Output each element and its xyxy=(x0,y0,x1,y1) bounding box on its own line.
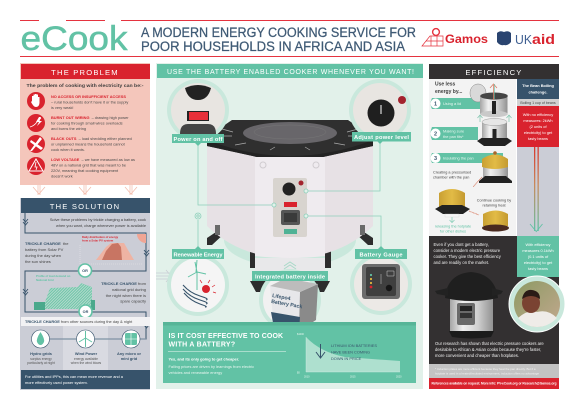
text: grid trickle charge: the night when there is xyxy=(106,293,146,298)
flow line xyxy=(25,213,146,339)
chart: solar energy: from a Solar PV system xyxy=(82,238,114,242)
pot: releasing: releasing the hotplate xyxy=(435,224,471,228)
step 1: lid xyxy=(430,84,508,117)
chart: battery price: DOWN IN PRICE xyxy=(331,356,362,361)
chart: battery price: 2010 xyxy=(304,376,310,378)
item: burnt out wiring: – drawing high power xyxy=(90,115,129,120)
column: bean boiling challenge: measures: 2kWh xyxy=(523,118,553,123)
cooker body xyxy=(207,140,373,258)
text: solar trickle charge: battery from Solar PV xyxy=(25,247,64,252)
column: bean boiling challenge: electricity) to get xyxy=(524,130,553,135)
panel: pressure cooker: measures 0.1kWh xyxy=(522,248,554,253)
panel: efficiency xyxy=(429,64,565,389)
step 1: lid: 1 xyxy=(434,102,437,108)
item: burnt out wiring xyxy=(27,114,129,132)
heading: WITH A BATTERY? xyxy=(168,342,236,348)
body text: Falling prices are driven by learnings from electric xyxy=(168,364,254,369)
cooker feet xyxy=(207,228,373,245)
text: research: desirable to African & Asian cooks because they're faster, xyxy=(435,347,541,352)
step 3: insulating: Creating a pressurised xyxy=(433,170,471,174)
step 2: pan flat xyxy=(430,115,512,146)
panel: the problem xyxy=(20,63,150,185)
pot: retaining heat xyxy=(469,177,511,232)
step 1: lid: Using a lid xyxy=(443,101,461,106)
text: grid trickle charge: national grid during xyxy=(112,287,146,292)
chart: battery price: $1000 xyxy=(297,333,305,336)
item: low voltage: 220V, meaning that cooking equipment xyxy=(51,168,119,173)
references xyxy=(429,378,559,389)
panel: cost effective xyxy=(163,322,416,383)
photo: cook xyxy=(509,276,565,332)
text: use less energy: Use less xyxy=(435,82,456,88)
callout: integrated battery: Battery Pack xyxy=(271,299,303,310)
intro text: Solve these problems by trickle charging a battery, cook xyxy=(50,217,146,222)
illustration: pressure cooker xyxy=(435,272,503,338)
panel: the solution xyxy=(20,198,150,390)
step 2: pan flat: Making sure xyxy=(443,128,464,134)
panel: pressure cooker xyxy=(429,236,565,364)
text: pressure cookers: cooker. They give the best efficiency xyxy=(434,254,502,259)
item: black outs xyxy=(27,135,132,153)
source: hydro: surplus energy xyxy=(30,357,52,361)
callout: renewable energy xyxy=(167,246,229,316)
item: low voltage: – we have measured as low as xyxy=(80,157,135,162)
step 2: pan flat: 2 xyxy=(434,132,437,138)
step 3: insulating: Insulating the pan xyxy=(443,156,474,160)
chart: battery price: HAVE BEEN COMING xyxy=(331,350,370,354)
callout: integrated battery xyxy=(252,262,328,331)
source: wind: Wind Power xyxy=(75,351,98,356)
pot: releasing xyxy=(435,189,471,234)
logo: Gamos xyxy=(422,29,488,46)
logo: UKaid: aid xyxy=(532,31,555,47)
text: use less energy: energy by... xyxy=(435,89,463,95)
source: micro grid: Any micro or xyxy=(117,351,141,356)
item: burnt out wiring: for cooking through small wires overloads xyxy=(51,120,123,126)
intro text: when you want, charge whenever power is available xyxy=(56,223,146,228)
intro text: The problem of cooking with electricity can be:- xyxy=(26,83,144,88)
text: pressure cookers: Even if you dont get a battery, xyxy=(434,242,489,247)
arrow: energy reduction xyxy=(530,147,542,232)
heading: USE THE BATTERY ENABLED COOKER WHENEVER YOU WANT! xyxy=(167,69,414,76)
item: low voltage: LOW VOLTAGE xyxy=(51,157,80,162)
callout: battery gauge xyxy=(350,246,412,315)
footnote: * Induction plates are more efficient because they heat the pan directly. But if a xyxy=(435,367,536,371)
text: pressure cookers: and are readily on the market. xyxy=(434,260,489,265)
item: no access: is very weak! xyxy=(51,105,74,110)
logo: UKaid: UK xyxy=(515,33,533,47)
logo: UKaid xyxy=(497,31,555,47)
chart: national grid xyxy=(34,274,95,310)
source: hydro: particularly at night xyxy=(27,361,55,365)
chart: battery price: LITHIUM ION BATTERIES xyxy=(331,343,377,348)
or badge: OR xyxy=(83,310,89,314)
chart: battery price: 2020 xyxy=(396,376,402,378)
text: solar trickle charge: the xyxy=(62,241,69,246)
logo title: eCook: eCook xyxy=(20,20,129,58)
callout: power on and off xyxy=(167,79,229,146)
source columns xyxy=(63,326,108,370)
panel: pressure cooker: With efficiency xyxy=(525,242,551,247)
chart: battery price: 2015 xyxy=(350,376,356,378)
source: wind: energy available xyxy=(74,357,98,361)
item: low voltage: doesn't work xyxy=(51,174,73,178)
heading: efficiency: EFFICIENCY xyxy=(465,68,523,77)
source: micro grid xyxy=(117,330,141,361)
headline: A MODERN ENERGY COOKING SERVICE FOR xyxy=(141,25,416,40)
logo: Gamos: Gamos xyxy=(445,34,488,46)
text: solar trickle charge: during the day when xyxy=(25,253,61,258)
footnote: hotplate is used in a heated/insulated environment, induction offers no advantage xyxy=(435,372,539,376)
body text: vehicles and renewable energy xyxy=(168,370,222,375)
item: black outs: – load shedding either planned xyxy=(78,136,132,141)
cooker control panel xyxy=(273,178,307,237)
footer: utilities: more effectively used power system. xyxy=(25,380,88,385)
column: bean boiling challenge: tasty beans xyxy=(528,136,548,141)
callout: adjust power level xyxy=(349,79,411,144)
pot: releasing: for other dishes xyxy=(440,230,466,234)
step 3: insulating: 3 xyxy=(434,156,437,162)
arrows: problem to solution xyxy=(33,185,137,195)
chart: battery price xyxy=(297,333,402,378)
heading: IS IT COST EFFECTIVE TO COOK xyxy=(168,333,284,340)
item: no access xyxy=(27,92,128,110)
callout: integrated battery: Integrated battery inside xyxy=(255,274,325,280)
text: research: more convenient and cheaper than hotplates. xyxy=(435,353,519,358)
chart: battery price: $0 xyxy=(297,372,300,374)
column: bean boiling challenge: challenge. xyxy=(528,90,548,94)
column: bean boiling challenge: Boiling 1 cup of beans xyxy=(520,101,556,105)
cooker xyxy=(207,120,373,292)
item: low voltage xyxy=(27,157,135,178)
item: no access: – rural households don't have it or the supply xyxy=(51,100,128,104)
halo: bottom of cooker xyxy=(224,213,356,267)
callout: renewable energy: Renewable Energy xyxy=(174,252,223,258)
header xyxy=(20,20,559,58)
item: burnt out wiring: BURNT OUT WIRING xyxy=(51,115,89,120)
source: wind xyxy=(71,330,102,365)
callout: battery gauge: Battery Gauge xyxy=(360,252,402,258)
item: burnt out wiring: and burns the wiring xyxy=(51,126,86,131)
chart: solar energy: Daily distribution of energy xyxy=(82,235,119,239)
panel: pressure cooker: tasty beans xyxy=(528,266,548,271)
footer: utilities: For utilities and IPPs, this can mean more revenue and a xyxy=(25,374,124,379)
item: low voltage: 48V on a national grid that was meant to be xyxy=(51,162,126,168)
pot: retaining heat: retaining heat xyxy=(482,204,506,208)
item: black outs: or unplanned means the household cannot xyxy=(51,142,126,146)
source: micro grid: mini grid xyxy=(121,356,138,361)
chart: national grid: Profile of load demand on xyxy=(36,274,71,278)
text: research: Our research has shown that electric pressure cookers are xyxy=(435,341,544,346)
or badge xyxy=(79,305,92,318)
callout: integrated battery: Lifepo4 xyxy=(272,293,291,302)
text: solar trickle charge: the sun shines xyxy=(25,259,51,264)
text: grid trickle charge: spare capacity xyxy=(120,298,146,304)
step 2: pan flat: the pan fits* xyxy=(443,134,464,139)
source: hydro: Hydro grids xyxy=(30,351,52,356)
text: solar trickle charge: TRICKLE CHARGE xyxy=(25,241,61,246)
headline: POOR HOUSEHOLDS IN AFRICA AND ASIA xyxy=(141,39,405,54)
source: wind: when the wind blows xyxy=(71,361,102,365)
callout: power on and off: Power on and off xyxy=(174,137,223,143)
chart: solar energy xyxy=(80,234,146,264)
or badge: OR xyxy=(82,269,88,273)
footnote xyxy=(429,364,559,378)
strip: other sources xyxy=(21,317,150,326)
or badge xyxy=(78,264,92,277)
column: bean boiling challenge: The Bean Boiling xyxy=(522,83,555,88)
footer: utilities xyxy=(21,370,150,389)
item: black outs: cook when it wants. xyxy=(51,147,85,152)
heading: the solution: THE SOLUTION xyxy=(50,202,120,211)
side arrow xyxy=(156,270,171,282)
column: bean boiling challenge xyxy=(517,79,559,236)
panel: pressure cooker: electricity) to get xyxy=(524,260,553,265)
step 3: insulating xyxy=(430,151,512,183)
chart: national grid: National Grid xyxy=(36,278,54,282)
connector lines xyxy=(195,143,381,249)
step 3: insulating: chamber with the pan xyxy=(433,176,469,180)
cooker lid xyxy=(207,120,373,157)
strip: other sources: TRICKLE CHARGE from other sources during the day & night xyxy=(25,319,133,324)
references: References available on request. More info: PV-eCook.org or Research@Gamos.org xyxy=(432,382,556,386)
callout: adjust power level: Adjust power level xyxy=(354,135,409,141)
body text: Yes, and its only going to get cheaper. xyxy=(168,356,239,362)
item: no access: NO ACCESS OR INSUFFICIENT ACCESS xyxy=(51,94,126,99)
heading: the problem: THE PROBLEM xyxy=(51,68,119,77)
pot: retaining heat: Continue cooking by xyxy=(477,198,511,202)
column: bean boiling challenge: (2 units of xyxy=(529,124,547,129)
panel: pressure cooker: (0.1 units of xyxy=(528,254,549,259)
text: pressure cookers: consider a modern electric pressure xyxy=(434,248,501,253)
column: bean boiling challenge: With no efficiency xyxy=(523,112,553,117)
item: black outs: BLACK OUTS xyxy=(51,136,77,141)
text: grid trickle charge: TRICKLE CHARGE from xyxy=(101,281,146,286)
panel: battery cooker xyxy=(156,63,423,389)
source: hydro xyxy=(27,330,55,365)
